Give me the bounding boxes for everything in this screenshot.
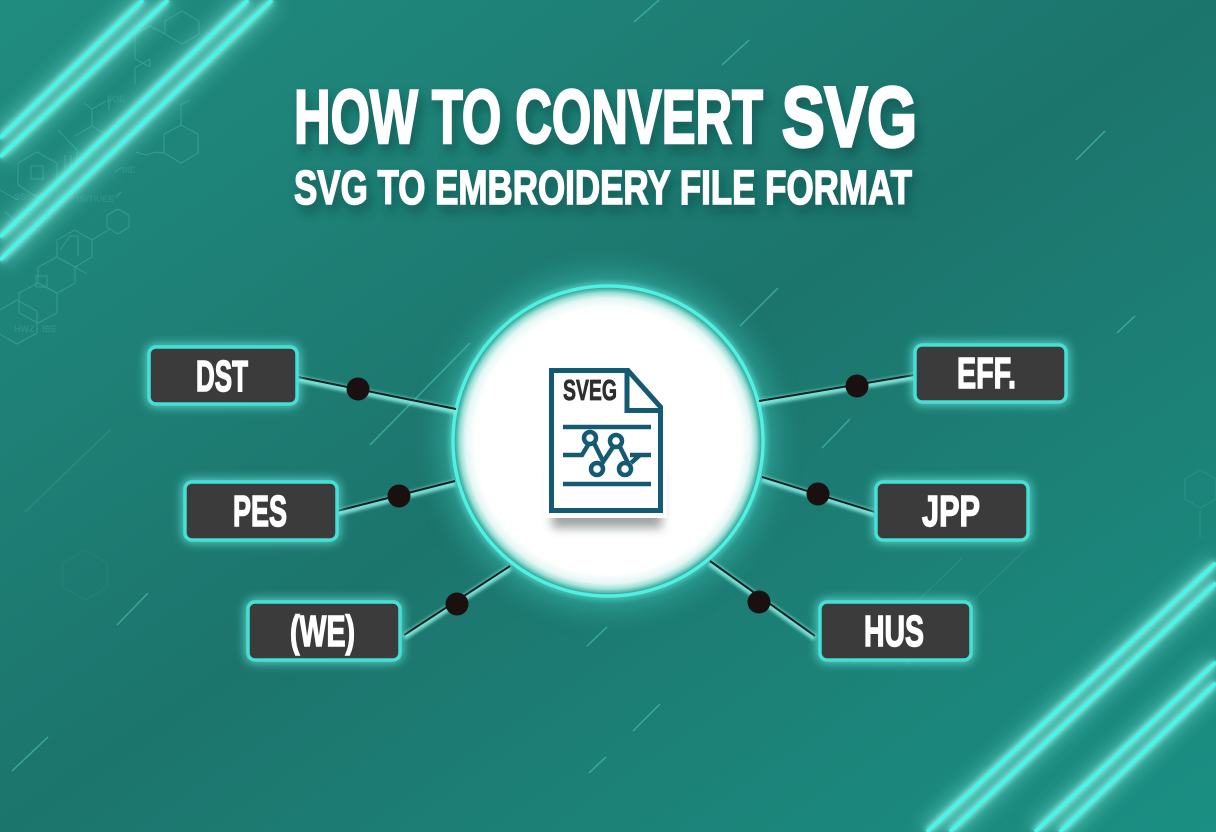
faint molecular labels [14, 94, 136, 334]
faint molecular labels: IIOE [107, 94, 125, 104]
connector lines [298, 375, 914, 638]
label: HUS [817, 599, 974, 663]
document lines [563, 427, 651, 484]
neon lines, bottom right [927, 563, 1216, 832]
title line 1: HOW TO CONVERT [294, 75, 763, 160]
faint molecular pattern, right edge [63, 470, 1216, 600]
label: HUS: HUS [864, 607, 924, 656]
central circle [440, 273, 776, 609]
title shadow: SVG TO EMBROIDERY FILE FORMAT [298, 166, 916, 222]
faint molecular labels: SSSSS [14, 192, 44, 202]
label: DST [146, 344, 300, 407]
label: JPP [873, 479, 1031, 543]
icon: SVG document [544, 365, 667, 528]
subtitle: SVG TO EMBROIDERY FILE FORMAT [294, 162, 912, 215]
neon lines, top left [0, 0, 272, 260]
faint molecular labels: IBE [42, 324, 57, 334]
label: PES [182, 479, 340, 543]
faint molecular labels: IIIE [122, 165, 136, 175]
label: JPP: JPP [922, 487, 980, 536]
title shadow: SVG [786, 77, 921, 173]
title shadow [298, 77, 921, 222]
title [294, 70, 921, 222]
label: PES: PES [233, 487, 287, 536]
faint molecular labels: HWZ [14, 324, 35, 334]
faint molecular pattern, top left [0, 11, 199, 344]
title accent word: SVG [782, 70, 917, 164]
label: (WE) [245, 599, 403, 663]
label: (WE): (WE) [290, 607, 355, 656]
icon: vector nodes [584, 432, 640, 475]
label: EFF. [912, 342, 1069, 405]
faint molecular labels: ISITIUEE [77, 194, 115, 204]
label: EFF.: EFF. [957, 349, 1016, 398]
document label: SVEG [563, 375, 617, 407]
connector nodes [346, 374, 868, 616]
label: DST: DST [196, 352, 248, 401]
title shadow: HOW TO CONVERT [298, 80, 767, 168]
